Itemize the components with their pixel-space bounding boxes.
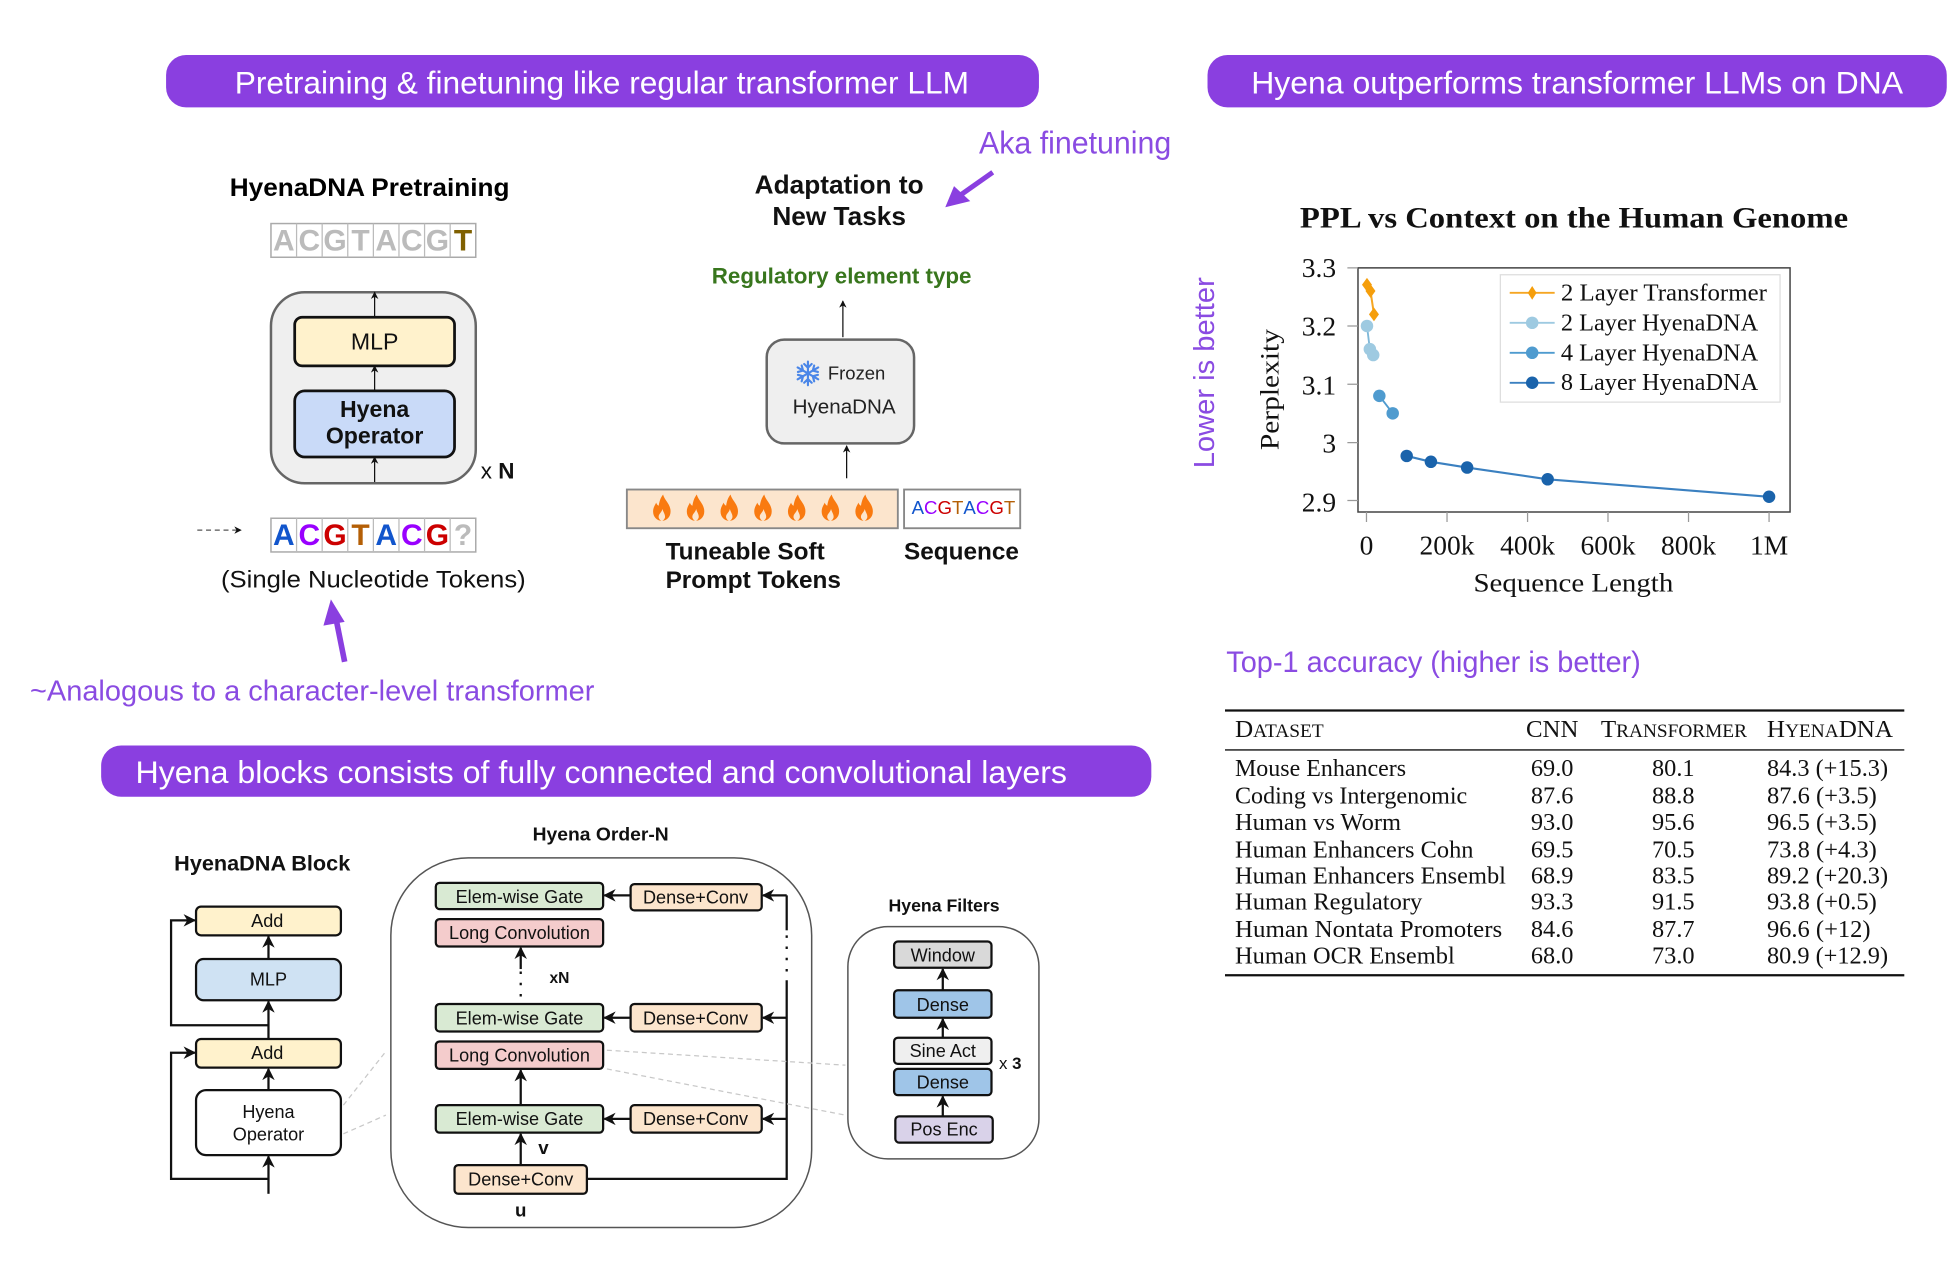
- token row: input: G: [426, 519, 449, 552]
- heading: HyenaDNA Pretraining: HyenaDNA Pretraining: [230, 174, 509, 202]
- box: dense conv u: [455, 1165, 587, 1194]
- box: gate 2: Elem-wise Gate: [456, 1009, 583, 1029]
- table rows: Coding vs Intergenomic: [1235, 783, 1467, 810]
- token row: target: T: [454, 224, 472, 257]
- x axis labels: 800k: [1661, 530, 1716, 560]
- box: Hyena Operator: [196, 1090, 341, 1155]
- box: Sine Act: [894, 1038, 991, 1064]
- table rows: Human Nontata Promoters: [1235, 916, 1502, 943]
- box: Dense bottom: [894, 1069, 991, 1095]
- table rows: 73.0: [1652, 942, 1695, 969]
- table rows: 87.6: [1531, 783, 1573, 810]
- table rows: 68.9: [1531, 862, 1573, 889]
- table rows: Mouse Enhancers: [1235, 755, 1406, 782]
- legend: 2 Layer HyenaDNA: [1561, 309, 1759, 336]
- table rows: 69.0: [1531, 755, 1573, 782]
- box: dense conv 2: Dense+Conv: [643, 1009, 748, 1029]
- heading: adaptation: New Tasks: [772, 201, 906, 231]
- chart title: PPL vs Context on the Human Genome: [1300, 202, 1848, 234]
- series: 8 layer hyenadna: [1400, 450, 1775, 503]
- box: gate 3: [436, 883, 603, 909]
- heading: hyena blocks: Hyena blocks consists of fully connected and convolutional layers: [135, 755, 1067, 790]
- heading: pretraining and finetuning: [166, 55, 1039, 107]
- box: Window: [894, 942, 991, 968]
- y axis labels: 3: [1322, 429, 1336, 459]
- box: Window: Window: [911, 946, 976, 966]
- y axis labels: 3.2: [1302, 311, 1336, 341]
- box: dense conv 2: [631, 1004, 762, 1031]
- box: gate 1: Elem-wise Gate: [456, 1109, 583, 1129]
- sequence box: ACGTACGT: [912, 497, 1015, 518]
- caption: single nucleotide tokens: (Single Nucleotide Tokens): [221, 567, 526, 594]
- y axis labels: [1302, 253, 1336, 517]
- sequence box: [904, 490, 1020, 528]
- label: u: u: [515, 1199, 526, 1220]
- box: frozen HyenaDNA: Frozen: [828, 363, 885, 384]
- icon: snowflake: [796, 362, 820, 385]
- table rows: 96.5 (+3.5): [1767, 809, 1877, 836]
- heading: Hyena Filters: Hyena Filters: [888, 896, 1000, 916]
- table rows: Human Enhancers Ensembl: [1235, 862, 1506, 889]
- table rows: 80.1: [1652, 755, 1695, 782]
- legend: 4 Layer HyenaDNA: [1561, 339, 1759, 366]
- table rows: 93.8 (+0.5): [1767, 889, 1877, 916]
- label: xN: xN: [549, 970, 569, 987]
- prompt tokens with flames: [627, 490, 898, 528]
- panel: Hyena Filters: [848, 927, 1039, 1159]
- box: Add bottom: [196, 1039, 341, 1068]
- block: repeated layer: [271, 292, 476, 483]
- y axis labels: 3.3: [1302, 253, 1336, 283]
- box: long convolution 1: Long Convolution: [449, 1045, 590, 1065]
- label: sequence: Sequence: [904, 539, 1019, 565]
- table rows: 70.5: [1652, 836, 1695, 863]
- axis title: Perplexity: Perplexity: [1255, 328, 1285, 450]
- box: gate 3: Elem-wise Gate: [456, 887, 583, 907]
- annotation: top-1 accuracy: Top-1 accuracy (higher is better): [1226, 646, 1641, 679]
- table rows: 68.0: [1531, 942, 1573, 969]
- box: frozen HyenaDNA: HyenaDNA: [793, 395, 896, 418]
- token row: input: [271, 518, 476, 552]
- box: Hyena Operator: [295, 391, 455, 457]
- table: top-1 accuracy: [1225, 711, 1904, 975]
- table rows: 69.5: [1531, 836, 1573, 863]
- connectors: zoom guide from long convolution to filters: [607, 1050, 845, 1115]
- table header: [1235, 716, 1893, 743]
- table header: HYENADNA: [1767, 716, 1893, 743]
- token row: input: A: [273, 519, 295, 552]
- label: x 3: x 3: [999, 1054, 1021, 1073]
- x axis labels: 1M: [1750, 530, 1788, 560]
- box: dense conv 1: [631, 1105, 762, 1133]
- table rows: 87.6 (+3.5): [1767, 783, 1877, 810]
- table rows: [1235, 755, 1888, 969]
- box: Pos Enc: [895, 1116, 993, 1143]
- table rows: 96.6 (+12): [1767, 916, 1871, 943]
- table rows: Human Regulatory: [1235, 889, 1423, 916]
- box: gate 1: [436, 1105, 603, 1133]
- box: MLP: MLP: [250, 969, 287, 989]
- y axis labels: 3.1: [1302, 371, 1336, 401]
- box: dense conv u: Dense+Conv: [468, 1170, 573, 1190]
- table rows: 95.6: [1652, 809, 1695, 836]
- token row: input: ?: [454, 519, 472, 552]
- annotation: analogous to character-level transformer: ~Analogous to a character-level transformer: [30, 676, 595, 708]
- token row: target: G: [323, 224, 347, 257]
- table rows: 83.5: [1652, 862, 1695, 889]
- x axis labels: 400k: [1500, 530, 1555, 560]
- legend: 2 Layer Transformer: [1561, 279, 1767, 306]
- box: long convolution 1: [436, 1041, 603, 1069]
- table rows: 84.6: [1531, 916, 1573, 943]
- line chart: PPL vs context: [1255, 202, 1848, 597]
- panel: adaptation to new tasks: [627, 170, 1020, 594]
- annotation: lower is better: Lower is better: [1189, 277, 1221, 468]
- box: Dense top: [894, 990, 991, 1018]
- label: x N: x N: [481, 458, 514, 483]
- panel: HyenaDNA block: [171, 852, 350, 1194]
- box: gate 2: [436, 1004, 603, 1031]
- label: tuneable soft prompt tokens: Tuneable Soft: [666, 538, 825, 565]
- token row: target: A: [273, 224, 295, 257]
- legend: [1500, 275, 1780, 402]
- box: Dense bottom: Dense: [917, 1072, 969, 1092]
- box: Add top: Add: [251, 911, 283, 931]
- token row: target: G: [426, 224, 449, 257]
- token row: input: C: [401, 519, 423, 552]
- series: 2 layer transformer: [1362, 278, 1379, 321]
- token row: target: T: [351, 224, 370, 257]
- x axis labels: [1360, 530, 1788, 560]
- annotation: aka finetuning: Aka finetuning: [979, 126, 1171, 161]
- box: Dense top: Dense: [917, 995, 969, 1015]
- table rows: Human Enhancers Cohn: [1235, 836, 1473, 863]
- box: dense conv 1: Dense+Conv: [643, 1109, 748, 1129]
- label: regulatory element type: Regulatory element type: [712, 263, 972, 288]
- heading: hyena blocks: [101, 746, 1151, 797]
- arrow: dashed input: [197, 529, 241, 531]
- token row: target: [271, 224, 476, 257]
- x axis labels: 0: [1360, 530, 1373, 560]
- series: 2 layer hyenadna: [1361, 320, 1379, 361]
- arrow: aka finetuning: [945, 172, 993, 207]
- table header: CNN: [1526, 716, 1579, 743]
- box: dense conv 3: Dense+Conv: [643, 887, 748, 907]
- heading: hyena outperforms: [1208, 55, 1947, 107]
- token row: input: T: [351, 519, 370, 552]
- table rows: Human vs Worm: [1235, 809, 1401, 836]
- table rows: 87.7: [1652, 916, 1695, 943]
- connectors: zoom guide from operator: [343, 1051, 386, 1134]
- heading: pretraining and finetuning: Pretraining & finetuning like regular transformer LLM: [235, 66, 969, 101]
- heading: HyenaDNA Block: HyenaDNA Block: [174, 852, 350, 875]
- box: dense conv 3: [631, 884, 762, 910]
- table header: DATASET: [1235, 716, 1324, 743]
- legend: 8 Layer HyenaDNA: [1561, 369, 1759, 396]
- table header: TRANSFORMER: [1601, 716, 1747, 743]
- table rows: Human OCR Ensembl: [1235, 942, 1455, 969]
- token row: target: C: [299, 224, 320, 257]
- box: MLP: [295, 317, 455, 366]
- arrow: output: [842, 301, 844, 337]
- table rows: 73.8 (+4.3): [1767, 836, 1877, 863]
- token row: input: G: [323, 519, 347, 552]
- box: Hyena Operator: Hyena: [340, 396, 409, 422]
- y axis labels: 2.9: [1302, 487, 1336, 517]
- box: Pos Enc: Pos Enc: [910, 1120, 978, 1140]
- box: MLP: [196, 959, 341, 1000]
- table rows: 89.2 (+20.3): [1767, 862, 1888, 889]
- box: Hyena Operator: Operator: [326, 422, 423, 448]
- table rows: 84.3 (+15.3): [1767, 755, 1888, 782]
- table rows: 80.9 (+12.9): [1767, 942, 1888, 969]
- table rows: 93.0: [1531, 809, 1573, 836]
- box: long convolution 2: Long Convolution: [449, 923, 590, 943]
- arrow: input: [846, 446, 848, 478]
- axis title: Sequence Length: Sequence Length: [1473, 567, 1674, 597]
- table rows: 93.3: [1531, 889, 1573, 916]
- arrow: analogous callout: [323, 599, 345, 662]
- box: Sine Act: Sine Act: [910, 1041, 976, 1061]
- panel: Hyena Order-N: [391, 858, 812, 1228]
- series: 4 layer hyenadna: [1373, 390, 1399, 420]
- box: MLP: MLP: [351, 329, 398, 355]
- token row: input: A: [375, 519, 397, 552]
- table rows: 91.5: [1652, 889, 1695, 916]
- box: Hyena Operator: Hyena: [242, 1102, 296, 1122]
- axes frame and ticks: [1347, 268, 1790, 522]
- box: frozen HyenaDNA: [767, 340, 914, 443]
- table rows: 88.8: [1652, 783, 1695, 810]
- box: long convolution 2: [436, 919, 603, 947]
- x axis labels: 600k: [1581, 530, 1636, 560]
- box: Add top: [196, 907, 341, 935]
- panel: HyenaDNA pretraining: [197, 174, 526, 594]
- x axis labels: 200k: [1420, 530, 1475, 560]
- label: v: v: [538, 1137, 549, 1158]
- heading: Hyena Order-N: Hyena Order-N: [533, 824, 669, 844]
- token row: target: C: [401, 224, 423, 257]
- heading: hyena outperforms: Hyena outperforms transformer LLMs on DNA: [1251, 66, 1903, 101]
- token row: target: A: [375, 224, 397, 257]
- box: Hyena Operator: Operator: [233, 1125, 304, 1145]
- box: Add bottom: Add: [251, 1043, 283, 1063]
- heading: adaptation: Adaptation to: [755, 170, 924, 200]
- token row: input: C: [299, 519, 320, 552]
- label: tuneable soft prompt tokens: Prompt Tokens: [666, 567, 841, 594]
